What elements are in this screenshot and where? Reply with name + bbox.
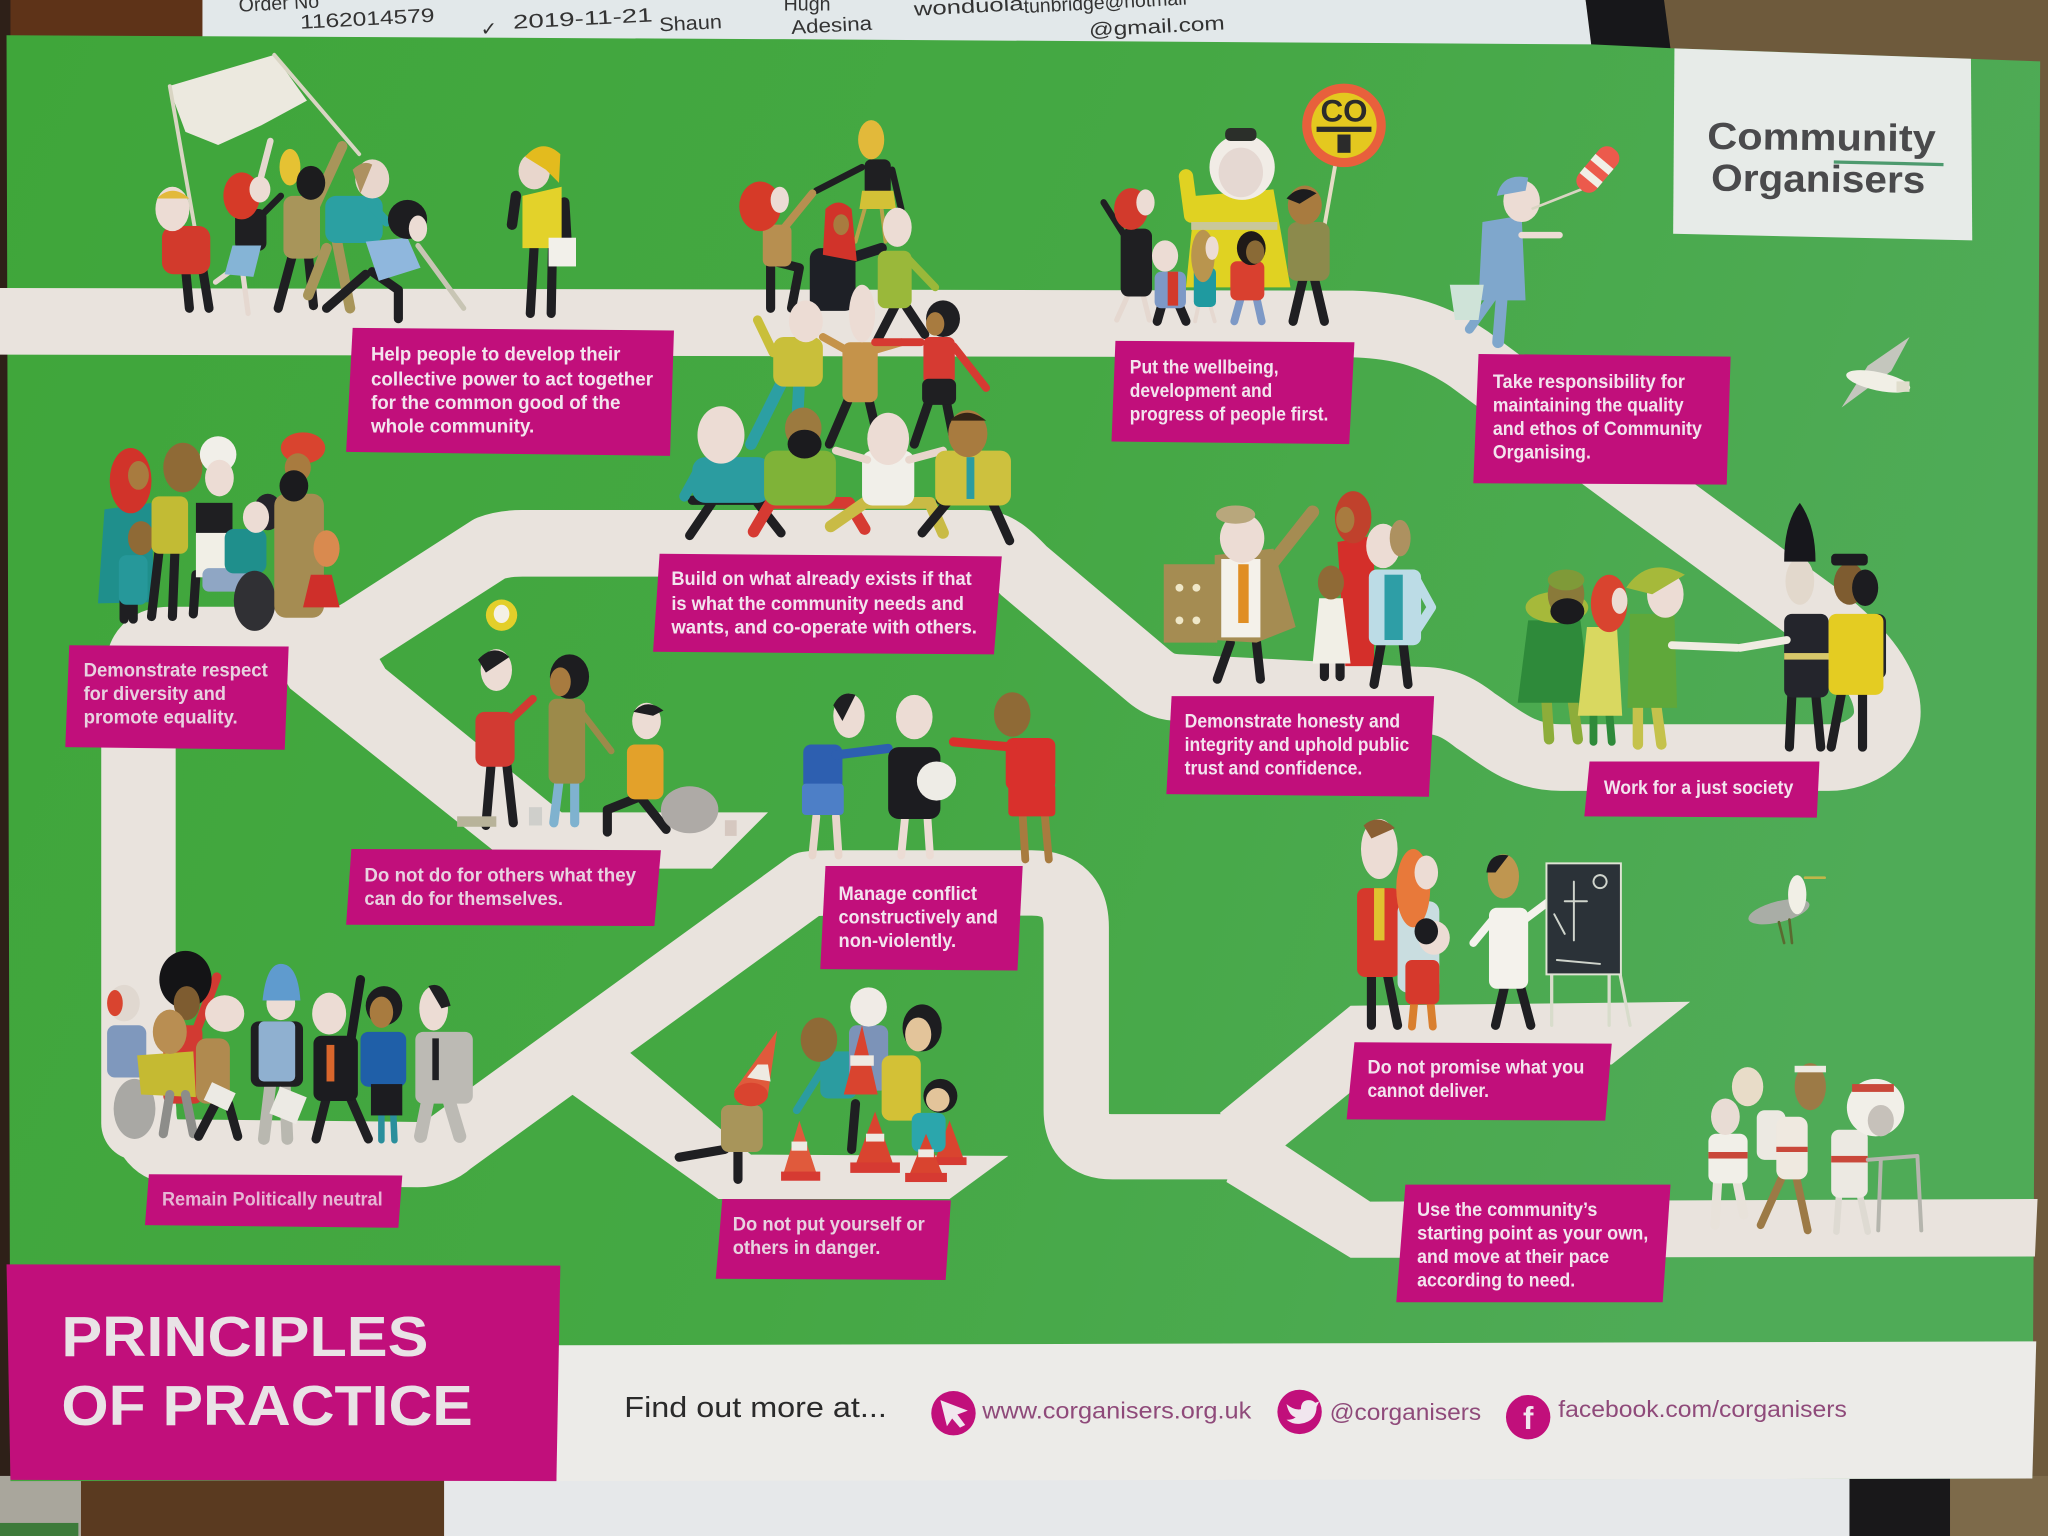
facebook link: facebook.com/corganisers (1558, 1396, 1847, 1422)
illustration: people raising a flag (155, 55, 576, 319)
community officer in hi-vis (1829, 554, 1886, 747)
footer call to action: Find out more at... (624, 1392, 887, 1424)
child (119, 521, 154, 619)
overalls man (1469, 177, 1560, 342)
illustration: people helping themselves (457, 600, 737, 836)
old lady with walker (1831, 1079, 1921, 1232)
label: do not do for others: Do not do for others what they (364, 865, 636, 887)
label: do not promise: Do not promise what you (1368, 1057, 1584, 1079)
label: community's starting point: starting point as your own, (1417, 1223, 1648, 1245)
large cone group (850, 1112, 967, 1173)
paper text: @gmail.com (1088, 12, 1225, 42)
label: help people: Help people to develop their (371, 343, 621, 365)
paper text: 2019-11-21 (512, 4, 653, 34)
label: community's starting point: Use the community’s (1417, 1199, 1597, 1221)
twitter link (1277, 1390, 1481, 1434)
man kneeling with bin (457, 703, 737, 836)
illustration: runners in white kit (1708, 1063, 1921, 1232)
title block: OF PRACTICE (61, 1374, 473, 1437)
girl (1191, 230, 1219, 321)
woman in red hat (1104, 188, 1155, 320)
person in wheelchair (107, 985, 155, 1139)
paper text: 1162014579 (300, 5, 435, 34)
facebook link: f (1523, 1401, 1534, 1436)
cone (781, 1121, 820, 1181)
person in wheelchair (202, 494, 282, 631)
paper text: Shaun (659, 11, 722, 36)
bucket (1450, 285, 1484, 320)
blackboard (1546, 863, 1630, 1025)
man in red (475, 649, 533, 825)
illustration: standing seagull (1746, 875, 1825, 943)
label: wellbeing first (1112, 341, 1354, 444)
worker in hard hat (512, 146, 576, 313)
man with blue shirt (1366, 520, 1432, 684)
striped windsock (1533, 134, 1624, 232)
man in teal (308, 159, 389, 308)
child in white (1313, 566, 1351, 677)
base man white vest (831, 413, 943, 533)
man in olive (1287, 185, 1330, 321)
label: honesty and integrity: Demonstrate honesty and (1185, 711, 1400, 733)
label: help people: whole community. (370, 415, 534, 437)
winding path (0, 321, 2038, 1258)
bearded man in green (1518, 569, 1591, 739)
man with blue helmet (251, 964, 307, 1139)
middle row tan shirt (823, 285, 901, 444)
woman in mustard (549, 654, 611, 823)
label: manage conflict: constructively and (839, 906, 998, 928)
child in red (1405, 918, 1450, 1027)
lollipop sign: CO (1320, 93, 1368, 128)
label: politically neutral: Remain Politically neutral (162, 1189, 383, 1211)
woman in yellow (882, 1004, 942, 1121)
title block: PRINCIPLES (61, 1305, 428, 1368)
woman in hijab, teal dress (98, 448, 154, 603)
label: take responsibility: maintaining the quality (1493, 394, 1684, 416)
label: take responsibility: Organising. (1493, 441, 1591, 463)
label: build on what exists: wants, and co-operate with others. (670, 616, 977, 638)
label: build on what exists: is what the community needs and (671, 593, 964, 615)
blue player (802, 694, 888, 856)
illustration: human pyramid (684, 120, 1011, 541)
illustration: watch seller and family (1164, 491, 1432, 684)
base man teal (684, 406, 781, 536)
red player (953, 692, 1055, 859)
boy (1152, 240, 1186, 321)
crouching woman with crutch (327, 200, 464, 319)
label: respect for diversity: promote equality. (84, 707, 238, 729)
illustration: people with traffic cones (679, 987, 967, 1182)
title block (7, 1264, 560, 1481)
label: manage conflict (820, 866, 1023, 970)
woman with red hair (216, 141, 281, 313)
label: take responsibility: and ethos of Community (1493, 418, 1702, 440)
label: manage conflict: non-violently. (839, 930, 956, 952)
label: just society: Work for a just society (1604, 777, 1793, 799)
bald runner (1732, 1067, 1785, 1160)
twitter link: @corganisers (1330, 1399, 1481, 1425)
man in Robin Hood hat (1626, 567, 1737, 744)
presenter in white shirt (1473, 854, 1549, 1025)
woman in blue (360, 986, 406, 1140)
top figure (816, 120, 901, 242)
label: help people: for the common good of the (371, 392, 621, 414)
woman with white bonnet (193, 436, 236, 614)
policeman (1740, 503, 1829, 747)
illustration: man with bucket and windsock (1450, 134, 1624, 342)
label: do not promise: cannot deliver. (1368, 1080, 1489, 1102)
paper text: ✓ (481, 18, 497, 40)
label: do not promise (1347, 1042, 1612, 1121)
label: honesty and integrity (1166, 696, 1434, 797)
label: respect for diversity: Demonstrate respect (84, 660, 268, 682)
logo: Community Organisers: Community (1707, 116, 1936, 160)
seller with watches (1164, 505, 1313, 679)
old man with paper (196, 995, 244, 1136)
label: community's starting point: and move at their pace (1417, 1246, 1609, 1268)
paper text (238, 0, 1225, 42)
child in red (155, 187, 210, 308)
label: help people: collective power to act together (371, 368, 653, 390)
logo: Community Organisers: Organisers (1711, 158, 1926, 202)
woman with afro (159, 951, 217, 1104)
man in teal holding cone (797, 1017, 857, 1149)
runner with headband (1761, 1063, 1826, 1230)
guard in hi-vis (1186, 128, 1290, 287)
man with red turban (274, 432, 325, 618)
middle row yellow shirt (751, 300, 823, 444)
base man yellow shirt (922, 410, 1011, 541)
label: honesty and integrity: trust and confidence. (1185, 758, 1362, 780)
label: politically neutral (145, 1174, 402, 1228)
base man green with beard (754, 408, 865, 532)
lollipop sign (1302, 84, 1386, 248)
label: wellbeing first: progress of people first. (1130, 404, 1328, 426)
woman in yellow (137, 1010, 196, 1134)
label: do not put in danger (716, 1199, 951, 1280)
illustration: flying seagull (1842, 337, 1912, 408)
woman in red sari (1335, 491, 1374, 666)
label: respect for diversity: for diversity and (84, 683, 226, 705)
label: respect for diversity (65, 645, 289, 750)
paper text: Adesina (791, 13, 873, 39)
label: community's starting point: according to need. (1417, 1270, 1575, 1292)
label: do not put in danger: Do not put yourself or (733, 1213, 925, 1235)
man in grey suit (415, 985, 473, 1136)
old man with large cone (844, 987, 888, 1095)
label: build on what exists (653, 554, 1002, 654)
tall man in red jacket (1357, 819, 1400, 1025)
label: manage conflict: Manage conflict (839, 883, 977, 905)
illustration: presenter at blackboard (1357, 819, 1630, 1027)
label: wellbeing first: development and (1130, 380, 1272, 402)
label: do not do for others (346, 849, 661, 926)
woman in hijab (810, 202, 882, 311)
illustration: Robin Hood group meets police (1518, 503, 1886, 747)
footer strip (556, 1341, 2036, 1481)
label: do not do for others: can do for themselves. (364, 888, 563, 910)
white flag (168, 55, 359, 308)
illustration: crossing guard with children (1104, 84, 1386, 321)
red hair climber (739, 182, 812, 308)
label: just society (1584, 761, 1819, 818)
label: do not put in danger: others in danger. (733, 1237, 880, 1259)
young runner (1708, 1098, 1748, 1225)
illustration: diverse group with wheelchair (98, 432, 340, 631)
label: take responsibility (1473, 354, 1731, 485)
boy in red (1230, 231, 1266, 321)
bearded man in mustard (278, 146, 342, 308)
label: build on what exists: Build on what already exists if that (671, 568, 972, 590)
man in black suit (312, 980, 368, 1139)
website link (931, 1391, 1252, 1435)
middle row red top (875, 300, 986, 444)
man in stripes (878, 208, 935, 340)
website link: www.corganisers.org.uk (981, 1397, 1252, 1423)
referee with ball (888, 695, 956, 856)
label: take responsibility: Take responsibility for (1493, 371, 1685, 393)
woman with orange hair (1396, 849, 1439, 993)
small girl (303, 530, 340, 607)
label: honesty and integrity: integrity and uphold public (1185, 734, 1409, 756)
facebook link (1506, 1395, 1847, 1439)
label: wellbeing first: Put the wellbeing, (1130, 357, 1279, 379)
lightbulb (486, 600, 517, 631)
person with cone on head (679, 1031, 777, 1179)
logo: Community Organisers (1673, 48, 1972, 240)
man in green (152, 443, 202, 616)
illustration: referee with two players (802, 692, 1055, 859)
label: community's starting point (1396, 1185, 1671, 1302)
label: help people (346, 328, 674, 456)
child in teal (905, 1079, 957, 1182)
illustration: political group (107, 951, 473, 1140)
woman in yellow dress (1578, 575, 1627, 742)
